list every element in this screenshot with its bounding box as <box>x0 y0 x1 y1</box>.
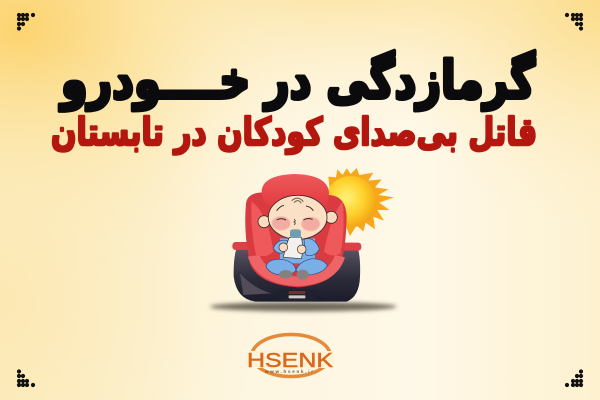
logo: HSENK <box>246 334 334 376</box>
torso <box>280 238 315 263</box>
right leg <box>296 259 327 275</box>
car seat shell <box>245 174 347 287</box>
hands <box>279 243 288 252</box>
logo wordmark: HSENK <box>247 350 334 372</box>
logo ring <box>252 334 330 376</box>
corner dots: top left <box>17 13 35 31</box>
baby <box>258 195 337 280</box>
bottle <box>283 237 303 259</box>
corner dots: bottom right <box>565 369 583 387</box>
ground shadow <box>210 302 397 311</box>
corner dots: bottom left <box>17 369 35 387</box>
cheeks <box>272 216 290 230</box>
illustration: baby in car seat with sun <box>210 168 397 311</box>
logo wordmark background <box>246 351 334 368</box>
mouth <box>294 219 295 225</box>
car seat base <box>234 250 360 302</box>
hair curl <box>292 198 303 203</box>
left sleeve <box>273 240 287 253</box>
armrests <box>232 242 361 251</box>
corner dots: top right <box>565 13 583 31</box>
logo url: www.hsenk.ir <box>264 369 313 374</box>
socks <box>279 270 292 279</box>
left leg <box>266 259 296 275</box>
icon: sun <box>325 168 394 236</box>
eyes and brows <box>277 205 313 220</box>
head <box>268 195 327 239</box>
right sleeve <box>304 239 319 256</box>
ears <box>258 216 270 228</box>
